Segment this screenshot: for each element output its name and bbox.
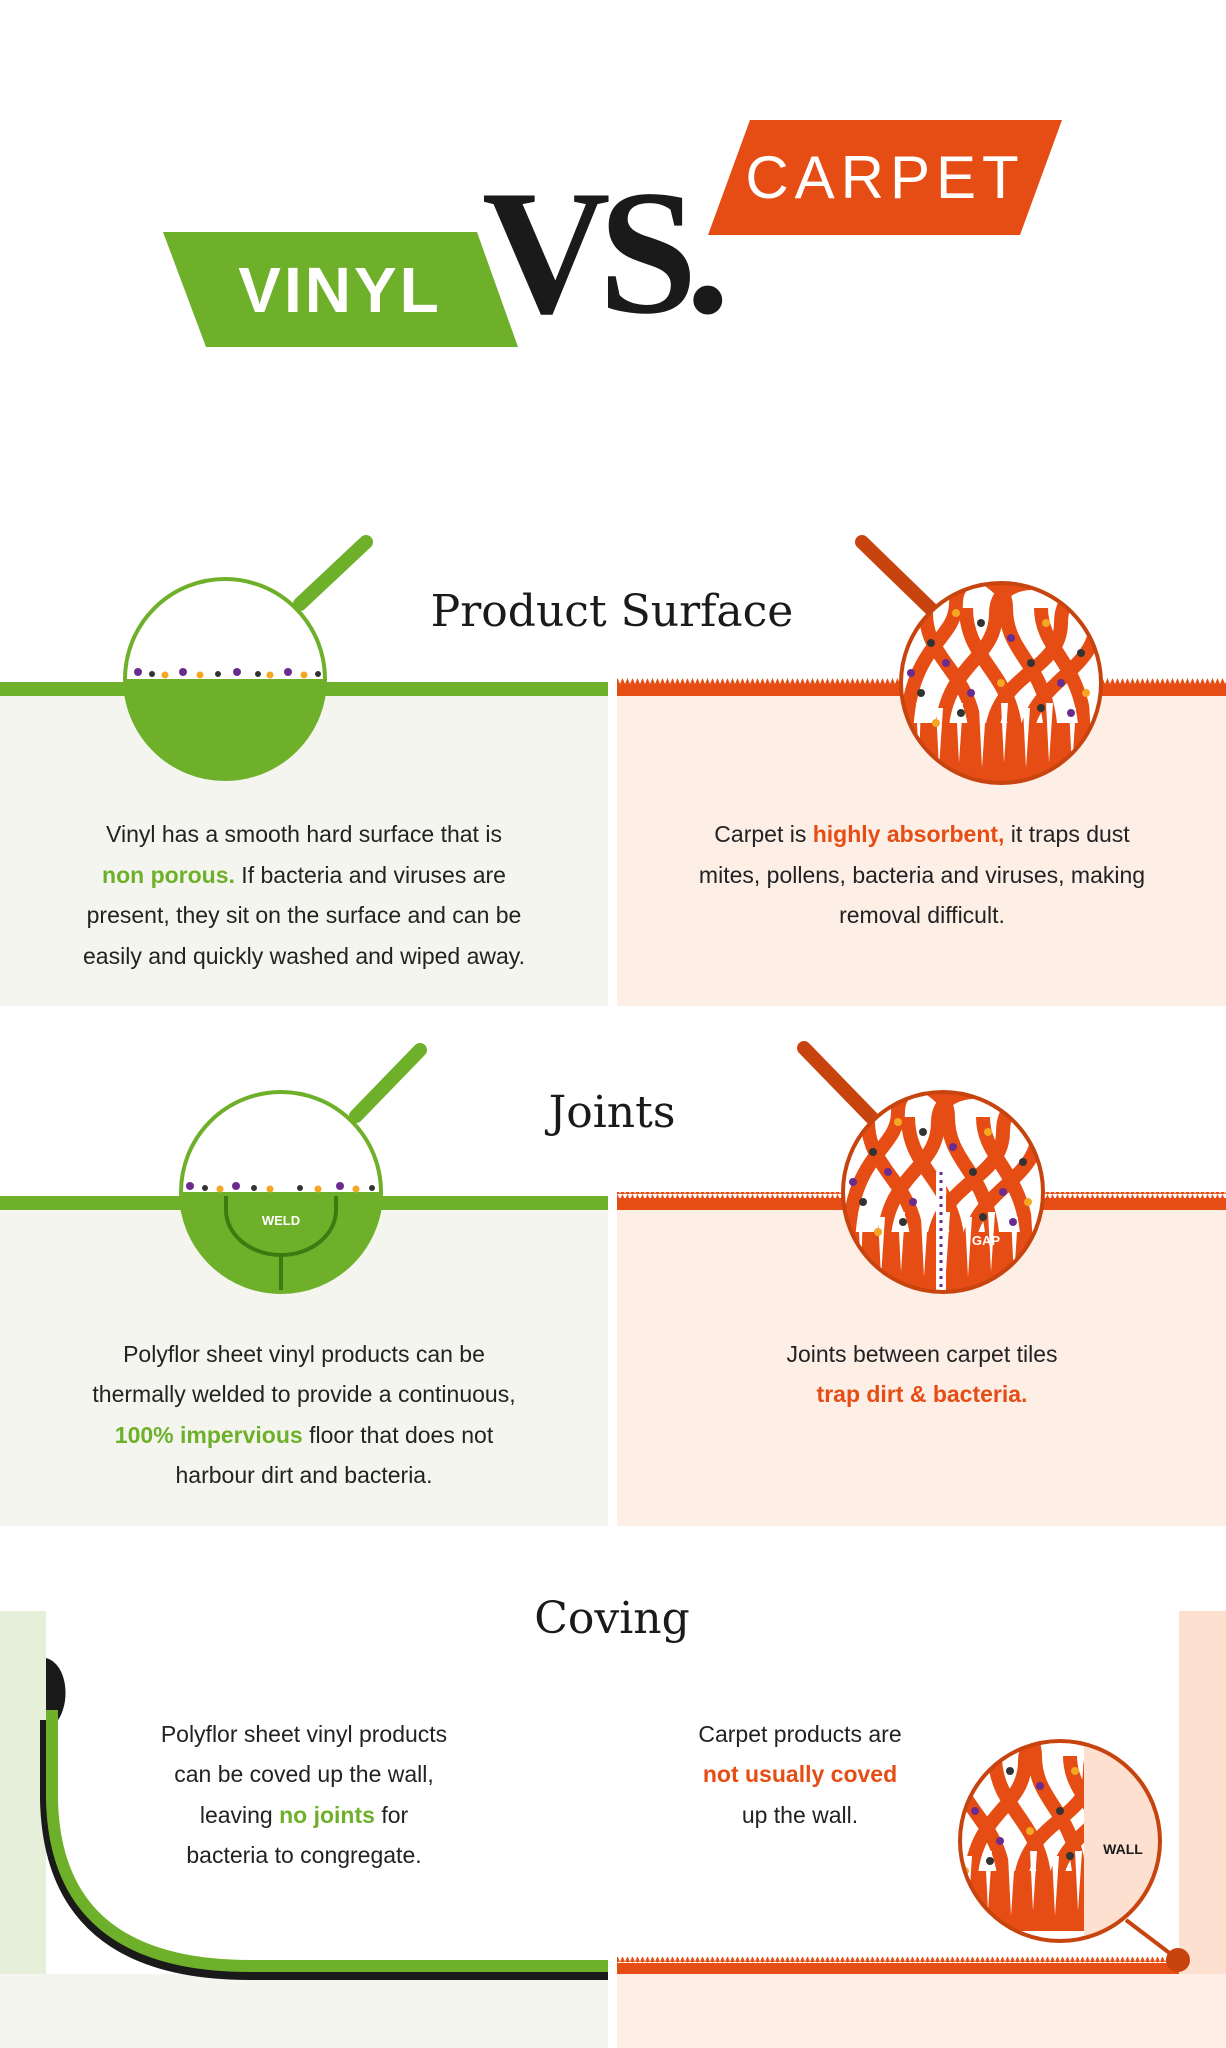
heading: product surface: Product Surface xyxy=(431,586,793,637)
icon: vinyl weld magnifier xyxy=(181,1050,420,1292)
badge: vinyl xyxy=(163,232,518,347)
icon: vinyl magnifier xyxy=(125,542,366,779)
text: vinyl surface: easily and quickly washed and wiped away. xyxy=(83,943,525,969)
vs: VS. xyxy=(482,153,723,351)
text: carpet coving: not usually coved xyxy=(703,1761,897,1787)
icon: coved vinyl xyxy=(46,1658,608,1974)
text: carpet coving: Carpet products are xyxy=(698,1721,902,1747)
heading: coving: Coving xyxy=(534,1593,690,1644)
icon: carpet wall magnifier xyxy=(617,1726,1190,1974)
badge: carpet: CARPET xyxy=(745,144,1025,211)
text: vinyl surface: present, they sit on the surface and can be xyxy=(87,902,521,928)
badge: vinyl: VINYL xyxy=(238,254,442,326)
heading: joints: Joints xyxy=(545,1087,675,1138)
text: vinyl surface: non porous. If bacteria and viruses are xyxy=(102,862,506,888)
text: vinyl surface: Vinyl has a smooth hard surface that is xyxy=(106,821,502,847)
icon: carpet gap magnifier xyxy=(804,1048,1043,1302)
text: carpet surface: Carpet is highly absorbent, it traps dust xyxy=(714,821,1130,847)
badge: carpet xyxy=(708,120,1062,235)
section: joints xyxy=(0,1048,1226,1526)
text: carpet surface: mites, pollens, bacteria and viruses, making xyxy=(699,862,1145,888)
section: product surface xyxy=(0,542,1226,1006)
text: carpet joints: trap dirt & bacteria. xyxy=(817,1381,1027,1407)
text: vinyl joints: harbour dirt and bacteria. xyxy=(176,1462,432,1488)
icon: vinyl weld magnifier: WELD xyxy=(262,1213,300,1228)
text: vinyl coving: can be coved up the wall, xyxy=(174,1761,434,1787)
icon: carpet gap magnifier: GAP xyxy=(972,1233,1000,1248)
icon: carpet magnifier xyxy=(862,542,1101,783)
text: vinyl coving: Polyflor sheet vinyl products xyxy=(161,1721,447,1747)
text: carpet coving: up the wall. xyxy=(742,1802,858,1828)
text: carpet joints: Joints between carpet tiles xyxy=(786,1341,1058,1367)
title xyxy=(163,120,1062,351)
text: vinyl coving: leaving no joints for xyxy=(200,1802,408,1828)
text: vinyl joints: thermally welded to provide a continuous, xyxy=(92,1381,516,1407)
text: vinyl joints: 100% impervious floor that does not xyxy=(115,1422,493,1448)
icon: carpet wall magnifier: WALL xyxy=(1103,1841,1143,1857)
text: vinyl joints: Polyflor sheet vinyl products can be xyxy=(123,1341,485,1367)
text: vinyl coving: bacteria to congregate. xyxy=(186,1842,422,1868)
section: coving xyxy=(0,1593,1226,2048)
text: carpet surface: removal difficult. xyxy=(839,902,1005,928)
